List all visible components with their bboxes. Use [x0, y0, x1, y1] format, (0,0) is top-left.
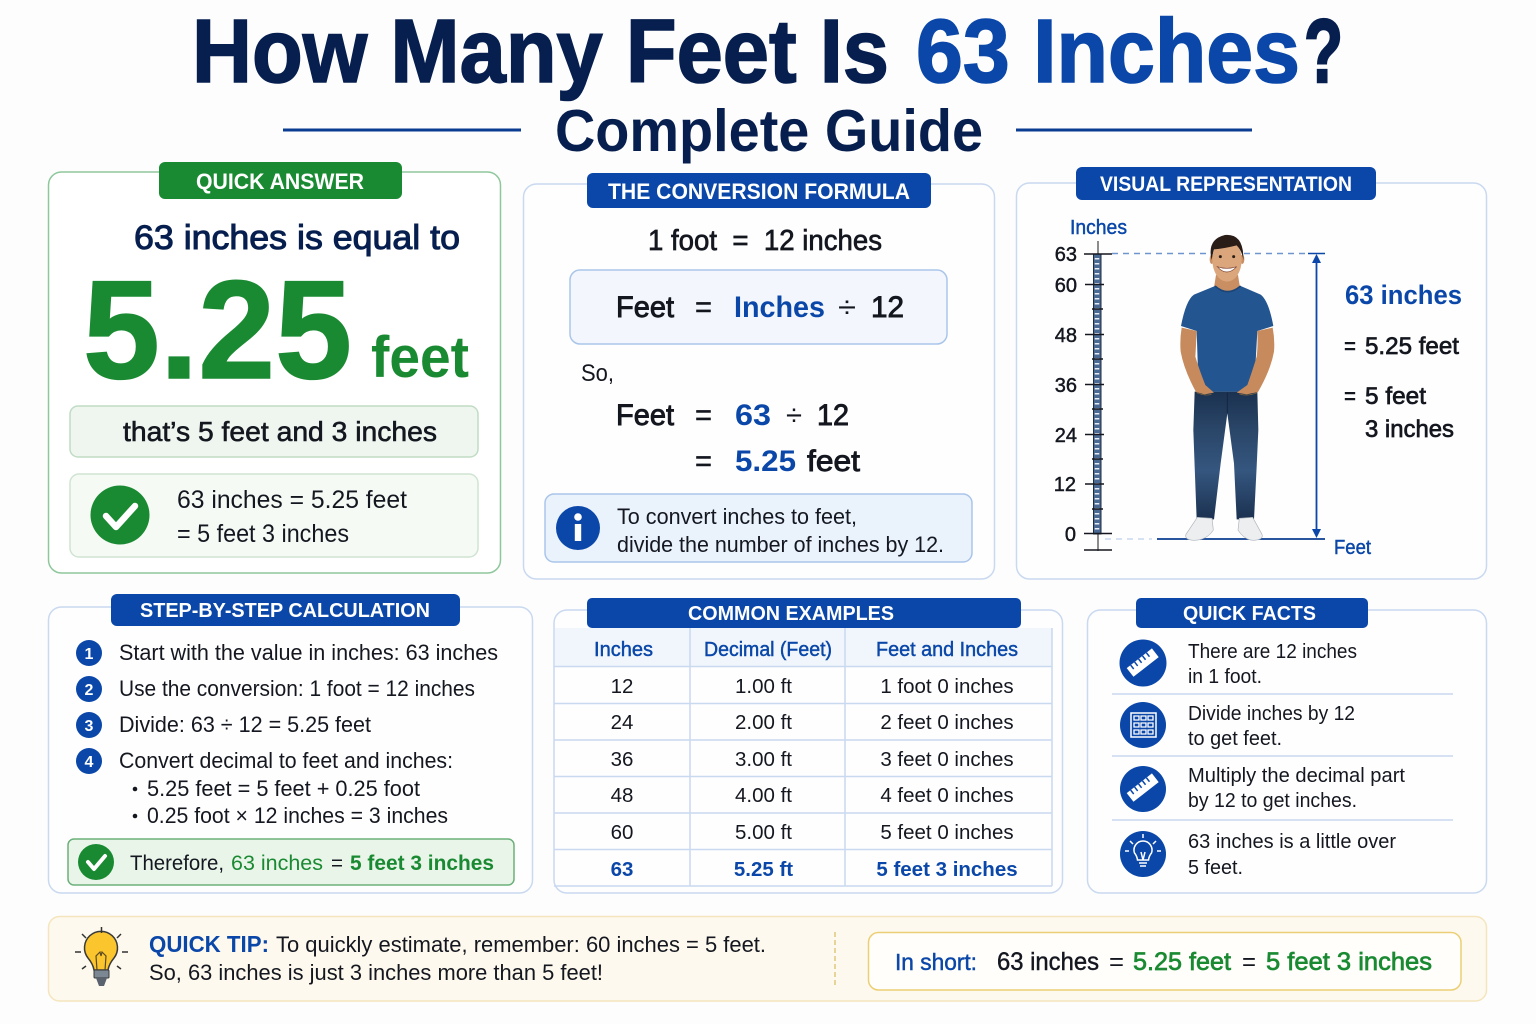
fact 3: Multiply the decimal part	[1188, 765, 1405, 787]
facts badge: QUICK FACTS	[1183, 603, 1316, 625]
panel: quick answer	[48, 162, 500, 573]
formula box: Inches	[734, 291, 825, 324]
info callout: To convert inches to feet,	[617, 504, 857, 529]
height values: 5 feet	[1365, 383, 1426, 410]
in short summary: 5.25 feet	[1133, 948, 1231, 976]
step 4: 0.25 foot × 12 inches = 3 inches	[147, 803, 448, 828]
fact 2: to get feet.	[1188, 728, 1282, 750]
step 1: Start with the value in inches: 63 inches	[119, 640, 498, 665]
examples table: 48	[611, 784, 633, 807]
height guide lines	[1105, 254, 1325, 539]
examples table: 2.00 ft	[735, 711, 792, 734]
panel: visual representation	[1016, 167, 1486, 579]
in short summary: =	[1109, 948, 1124, 976]
ruler: 63	[1055, 244, 1077, 266]
in short summary: 63 inches	[997, 948, 1099, 976]
examples table: Inches	[594, 639, 653, 661]
title	[192, 2, 1343, 102]
neck	[1214, 275, 1240, 292]
shirt	[1181, 286, 1273, 392]
step 3: Divide: 63 ÷ 12 = 5.25 feet	[119, 712, 371, 737]
base fact: 1 foot = 12 inches	[648, 225, 882, 257]
formula box: 12	[871, 291, 904, 324]
worked calculation: So,	[581, 360, 614, 387]
fact 3: by 12 to get inches.	[1188, 790, 1357, 812]
worked calculation: =	[695, 399, 712, 432]
formula badge	[587, 173, 931, 208]
examples table	[554, 628, 1052, 886]
ruler axis label: Inches	[1070, 217, 1127, 239]
examples table: 5 feet 3 inches	[876, 858, 1018, 881]
big answer: 5.25	[83, 251, 352, 408]
feet axis label: Feet	[1334, 537, 1371, 559]
answer summary: = 5 feet 3 inches	[177, 520, 349, 548]
examples table: 2 feet 0 inches	[880, 711, 1014, 734]
step 4: 5.25 feet = 5 feet + 0.25 foot	[147, 776, 420, 801]
examples badge	[587, 598, 1021, 628]
answer summary	[70, 474, 478, 557]
fact 2: Divide inches by 12	[1188, 703, 1355, 725]
step 4: Convert decimal to feet and inches:	[119, 748, 453, 773]
examples table: 24	[611, 711, 633, 734]
step 4: 4	[85, 754, 94, 771]
examples table: 1 foot 0 inches	[880, 675, 1014, 698]
fact 2	[1120, 702, 1355, 750]
conclusion callout: 63 inches	[231, 852, 323, 875]
examples table: 3 feet 0 inches	[880, 748, 1014, 771]
height values: =	[1344, 333, 1356, 360]
icon: check	[90, 486, 150, 544]
examples table: 4 feet 0 inches	[880, 784, 1014, 807]
conclusion callout: =	[331, 852, 343, 875]
ruler: 36	[1055, 375, 1077, 397]
ruler: 24	[1055, 425, 1077, 447]
examples table: 63	[611, 858, 633, 881]
title: 63 Inches	[916, 2, 1300, 102]
formula box	[570, 270, 947, 344]
shoes	[1186, 517, 1213, 540]
fact 4: 63 inches is a little over	[1188, 831, 1396, 853]
step 4	[76, 748, 453, 828]
height values: 5.25 feet	[1365, 333, 1459, 360]
examples table: Feet and Inches	[876, 639, 1018, 661]
panel: conversion formula	[524, 173, 994, 579]
in short summary: 5 feet 3 inches	[1266, 948, 1432, 976]
person	[1180, 235, 1274, 540]
ruler: 60	[1055, 275, 1077, 297]
examples table: 12	[611, 675, 633, 698]
step 3: 3	[85, 718, 94, 735]
height values	[1344, 280, 1462, 443]
fact 1	[1120, 640, 1357, 688]
height values: 3 inches	[1365, 416, 1454, 443]
panel: step-by-step calculation	[48, 594, 532, 893]
panel: common examples	[554, 598, 1062, 893]
quick answer badge	[159, 162, 402, 199]
icon: info	[556, 506, 600, 550]
title: ?	[1304, 2, 1343, 102]
subtitle: Complete Guide	[555, 98, 983, 164]
icon: grid	[1120, 702, 1166, 748]
info callout: divide the number of inches by 12.	[617, 532, 944, 557]
icon: ruler	[1120, 640, 1166, 686]
icon: yellow light bulb	[75, 927, 128, 986]
worked calculation: ÷	[786, 399, 802, 432]
table background	[555, 628, 1052, 666]
examples table: Decimal (Feet)	[704, 639, 832, 661]
answer in feet and inches: that’s 5 feet and 3 inches	[123, 416, 437, 447]
formula box: =	[695, 291, 712, 324]
tip text	[149, 931, 766, 985]
icon: ruler	[1120, 766, 1166, 812]
panel: quick facts	[1088, 598, 1486, 893]
head	[1210, 255, 1214, 264]
examples table: 3.00 ft	[735, 748, 792, 771]
step 1: 1	[85, 646, 94, 663]
step 2: 2	[85, 682, 94, 699]
fact 1: There are 12 inches	[1188, 641, 1357, 663]
steps badge: STEP-BY-STEP CALCULATION	[140, 600, 430, 622]
info callout	[545, 494, 972, 562]
in short summary	[868, 932, 1461, 990]
step 2: Use the conversion: 1 foot = 12 inches	[119, 676, 475, 701]
fact 4: 5 feet.	[1188, 857, 1243, 879]
examples table: 5 feet 0 inches	[880, 821, 1014, 844]
icon: light bulb	[1120, 831, 1166, 877]
lead-in text: 63 inches is equal to	[134, 219, 460, 257]
fact 3	[1120, 765, 1405, 812]
in short summary: In short:	[895, 949, 977, 975]
visual badge: VISUAL REPRESENTATION	[1100, 173, 1352, 196]
arms	[1180, 328, 1214, 394]
worked calculation	[581, 360, 861, 478]
conclusion callout	[68, 839, 514, 885]
height values: 63 inches	[1345, 280, 1462, 310]
quick answer badge: QUICK ANSWER	[196, 169, 364, 194]
conclusion callout: 5 feet 3 inches	[350, 852, 494, 875]
jeans drawn first so the hands overlap the pockets	[1193, 392, 1258, 519]
conclusion callout: Therefore,	[130, 852, 224, 875]
examples table: 1.00 ft	[735, 675, 792, 698]
fact 1: in 1 foot.	[1188, 666, 1262, 688]
height arrow	[1312, 254, 1321, 538]
worked calculation: 12	[817, 399, 849, 432]
worked calculation: =	[695, 445, 712, 478]
tip text: So, 63 inches is just 3 inches more than 5 feet!	[149, 960, 603, 985]
worked calculation: 63	[735, 399, 771, 432]
examples table: 5.25 ft	[734, 858, 793, 881]
formula badge: THE CONVERSION FORMULA	[608, 179, 910, 204]
examples table: 60	[611, 821, 633, 844]
steps badge	[111, 594, 460, 626]
tip text: QUICK TIP:	[149, 931, 269, 957]
visual badge	[1076, 167, 1376, 200]
icon: check	[78, 844, 114, 880]
examples table: 4.00 ft	[735, 784, 792, 807]
ruler: 0	[1065, 524, 1076, 546]
answer in feet and inches	[70, 406, 478, 457]
tip text: To quickly estimate, remember: 60 inches = 5 feet.	[276, 932, 766, 957]
examples table: 36	[611, 748, 633, 771]
ruler: 12	[1054, 474, 1076, 496]
height values: =	[1344, 383, 1356, 410]
examples badge: COMMON EXAMPLES	[688, 603, 894, 625]
formula box: Feet	[616, 291, 675, 324]
title: How Many Feet Is	[192, 2, 889, 102]
worked calculation: Feet	[616, 399, 675, 432]
in short summary: =	[1242, 948, 1256, 976]
worked calculation: 5.25	[735, 445, 796, 478]
panel: quick tip banner	[48, 916, 1486, 1001]
worked calculation: feet	[807, 445, 861, 478]
facts badge	[1136, 598, 1368, 628]
ruler: 48	[1055, 325, 1077, 347]
fact 4	[1120, 831, 1396, 879]
formula box: ÷	[838, 291, 856, 324]
ruler	[1054, 241, 1112, 551]
answer summary: 63 inches = 5.25 feet	[177, 486, 407, 514]
examples table: 5.00 ft	[735, 821, 792, 844]
big answer: feet	[371, 325, 469, 390]
